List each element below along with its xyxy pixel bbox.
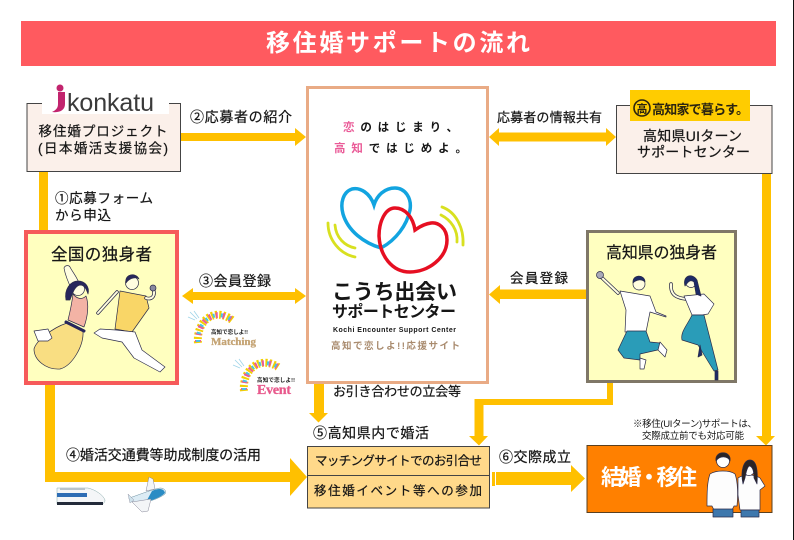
label: member registration 3: ③会員登録 <box>199 273 271 289</box>
illustration: jumping couple <box>596 272 718 380</box>
note: migration support <box>633 418 757 442</box>
heading: 高知県の独身者 <box>606 244 717 262</box>
label: meeting attendance: お引き合わせの立会等 <box>333 384 461 399</box>
arrow: referral of applicants <box>180 128 306 146</box>
logo: two hearts <box>328 188 463 272</box>
tagline: 高知 ではじめよ。 <box>334 141 467 155</box>
label: step 6: ⑥交際成立 <box>499 449 571 465</box>
panel: Kochi UI-turn support center <box>616 90 772 174</box>
icon: Matching rainbow logo: 高知で恋しよ!! <box>211 328 248 336</box>
icon: Event rainbow logo: 高知で恋しよ!! <box>257 376 295 384</box>
arrow: Kochi singles elbow to marriage activity <box>469 383 613 446</box>
heading: 全国の独身者 <box>51 245 152 264</box>
logo: Kochi-ke de kurasu: 高知家で暮らす。 <box>652 102 749 117</box>
icon: Event rainbow logo <box>233 359 295 398</box>
tagline: 恋 のはじまり、 <box>343 120 458 134</box>
arrow: member registration both ways <box>182 288 306 304</box>
label: step 1: から申込 <box>55 208 112 223</box>
panel: marriage and migration <box>587 446 772 517</box>
arrow: right column down to marriage and migration <box>756 174 775 446</box>
logo: jkonkatu <box>42 84 169 117</box>
panel: marriage and migration: 結婚・移住 <box>601 465 697 490</box>
tagline <box>334 120 467 155</box>
illustration: jumping couple <box>34 266 165 372</box>
logo: Kochi-ke de kurasu <box>630 90 750 121</box>
logo: Kochi-ke de kurasu: 高 <box>636 102 648 116</box>
label: step 4: ④婚活交通費等助成制度の活用 <box>66 447 261 463</box>
title banner <box>21 21 776 66</box>
label: step 1: ①応募フォーム <box>55 191 153 206</box>
label: step 5: ⑤高知県内で婚活 <box>313 425 429 441</box>
arrow: center down to marriage activity <box>309 384 328 422</box>
illustration: couple <box>707 453 765 517</box>
panel: nationwide singles <box>26 232 177 383</box>
panel: konkatu project: (日本婚活支援協会) <box>38 141 168 156</box>
panel: Kochi UI-turn support center: 高知県UIターン <box>643 128 742 144</box>
panel: marriage activity options: マッチングサイトでのお引合せ <box>315 454 482 468</box>
center name: こうち出会い <box>332 281 457 304</box>
icon: Event rainbow logo: Event <box>257 383 291 398</box>
panel: konkatu project: 移住婚プロジェクト <box>38 124 168 139</box>
label: information sharing: 応募者の情報共有 <box>497 110 602 125</box>
icon: airplane <box>128 477 166 512</box>
icon: Matching rainbow logo: Matching <box>211 336 256 348</box>
panel: marriage activity options <box>308 446 490 508</box>
center name: サポートセンター <box>332 303 456 321</box>
panel: Kochi UI-turn support center: サポートセンター <box>637 144 750 160</box>
logo: jkonkatu: konkatu <box>67 89 154 117</box>
arrow: relationship established <box>492 465 585 492</box>
center name <box>331 281 460 352</box>
label: step 1 <box>55 191 153 223</box>
icon: bullet train <box>57 488 105 505</box>
arrow: application form down to nationwide singles <box>39 171 48 231</box>
note: migration support: 交際成立前でも対応可能 <box>642 430 744 442</box>
arrow: nationwide singles to marriage activity <box>45 385 307 496</box>
arrow: shared applicant information <box>489 128 616 146</box>
note: migration support: ※移住(UIターン)サポートは、 <box>633 418 757 430</box>
center name: 高知で恋しよ!!応援サイト <box>331 340 460 352</box>
label: member registration: 会員登録 <box>510 271 568 286</box>
panel: konkatu project <box>27 84 180 172</box>
panel: Kochi singles <box>588 232 736 382</box>
label: step 2: ②応募者の紹介 <box>190 109 292 125</box>
icon: Matching rainbow logo <box>188 311 256 348</box>
center name: Kochi Encounter Support Center <box>333 327 456 334</box>
panel: marriage activity options: 移住婚イベント等への参加 <box>314 483 482 498</box>
title banner: 移住婚サポートの流れ <box>266 30 530 57</box>
panel: Kochi Encounter Support Center <box>308 88 488 382</box>
arrow: Kochi member registration <box>489 285 586 304</box>
